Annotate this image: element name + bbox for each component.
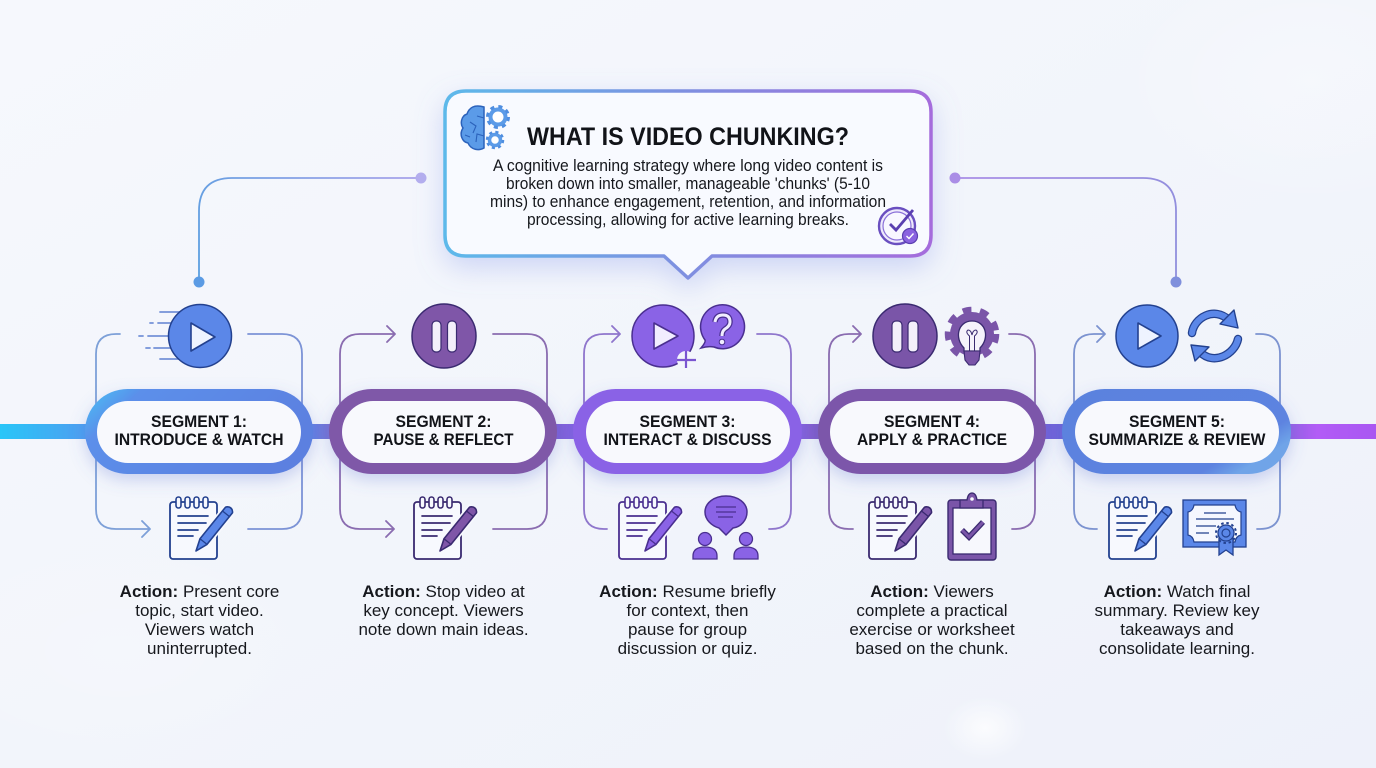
action text: complete a practical [856,601,1008,620]
action text: takeaways and [1120,620,1234,639]
action text: for context, then [627,601,748,620]
icon: notepad [414,497,477,559]
icon: pause and gear bulb [873,304,996,368]
segment pill: SEGMENT 1: [151,413,247,431]
flow arrows [340,326,547,537]
action text: uninterrupted. [147,639,252,658]
description: broken down into smaller, manageable 'chunks' (5-10 [506,175,870,193]
description [490,157,886,229]
segment pill: PAUSE & REFLECT [374,431,514,449]
icon: notepad [1109,497,1172,559]
icon: notepad [869,497,932,559]
segment pill [85,389,313,474]
icon: pause [412,304,476,368]
segment pill [1062,389,1291,474]
action text: Viewers watch [145,620,254,639]
segment pill: INTERACT & DISCUSS [604,431,772,449]
action text: consolidate learning. [1099,639,1255,658]
segment pill: SEGMENT 3: [640,413,736,431]
segment pill: SEGMENT 4: [884,413,980,431]
panel: segment 5 [1062,305,1291,658]
action text: Action: [1104,582,1162,601]
timeline bar [0,424,1376,439]
panel: segment 3 [573,305,802,658]
icon: play with speed lines [139,304,232,368]
action text: Action: [870,582,929,601]
segment pill: SUMMARIZE & REVIEW [1088,431,1266,449]
segment pill [329,389,557,474]
action text: key concept. Viewers [363,601,524,620]
flow arrows [829,326,1035,529]
flow arrows [584,326,791,529]
action text: pause for group [628,620,747,639]
action text: discussion or quiz. [618,639,757,658]
action text: Action: [120,582,178,601]
action text: Resume briefly [658,582,776,601]
callout: what is video chunking [445,91,931,278]
icon: discussion group [693,496,758,559]
action text: Present core [178,582,279,601]
icon: play and refresh [1116,305,1238,367]
icon: play and question [632,305,745,369]
icon: clipboard with check [948,493,996,560]
action text: Watch final [1162,582,1250,601]
icon: clock with check [879,208,918,244]
callout box [445,91,931,278]
action text: topic, start video. [135,601,264,620]
icon: notepad [619,497,682,559]
description: A cognitive learning strategy where long video content is [493,157,883,175]
flow arrows [96,334,302,537]
action text: Action: [599,582,658,601]
action text: Action: [362,582,421,601]
segment pill [573,389,802,474]
panel: segment 2 [329,304,557,639]
icon: brain and gears [461,106,508,150]
flow arrows [1074,326,1280,529]
connector: callout to segment 1 [194,172,426,288]
segment pill: INTRODUCE & WATCH [114,431,284,449]
action text: note down main ideas. [358,620,529,639]
heading: WHAT IS VIDEO CHUNKING? [527,123,849,151]
description: mins) to enhance engagement, retention, and information [490,193,886,211]
icon: certificate [1183,500,1246,555]
segment pill: SEGMENT 5: [1129,413,1225,431]
action text: exercise or worksheet [849,620,1015,639]
segment pill [818,389,1046,474]
panel: segment 4 [818,304,1046,658]
segment pill: APPLY & PRACTICE [857,431,1007,449]
connector: callout to segment 5 [950,172,1182,288]
description: processing, allowing for active learning breaks. [527,211,849,229]
action text: summary. Review key [1094,601,1260,620]
action text: based on the chunk. [855,639,1009,658]
segment pill: SEGMENT 2: [396,413,492,431]
panel: segment 1 [85,304,313,658]
action text: Viewers [929,582,994,601]
action text: Stop video at [421,582,525,601]
icon: notepad [170,497,233,559]
